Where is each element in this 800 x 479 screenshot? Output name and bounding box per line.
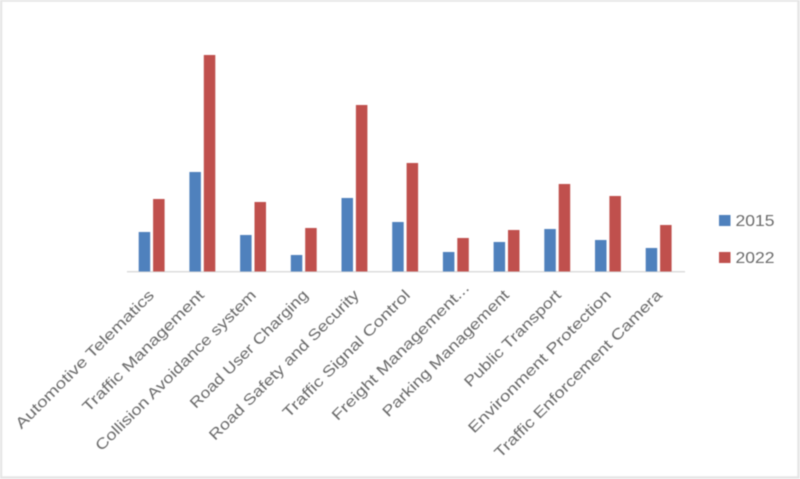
label: Public Transport: Public Transport [461,286,566,391]
bars: Environment Protection [595,196,621,272]
label: Collision Avoidance system: Collision Avoidance system [92,287,260,454]
label: Road Safety and Security: Road Safety and Security [206,286,363,444]
label: Road User Charging: Road User Charging [187,287,312,412]
bars: Collision Avoidance system [240,202,266,272]
bars: Traffic Enforcement Camera [646,225,672,272]
legend item: 2022: 2022 [736,250,774,267]
bars: Freight Management [443,238,469,272]
bars: Road User Charging [291,228,317,272]
label: Automotive Telematics: Automotive Telematics [12,287,158,432]
bars: Parking Management [494,230,520,272]
legend [719,213,774,267]
label: Freight Management...: Freight Management... [329,280,473,424]
label: Environment Protection: Environment Protection [465,287,615,437]
legend item: 2015: 2015 [736,213,774,230]
bars: Automotive Telematics [139,199,165,272]
bars: Public Transport [544,184,570,272]
bars: Traffic Management [189,55,215,272]
label: Parking Management: Parking Management [379,286,514,420]
label: Traffic Management: Traffic Management [79,286,209,416]
label: Traffic Enforcement Camera: Traffic Enforcement Camera [491,286,666,461]
bars: Traffic Signal Control [392,163,418,272]
bar chart [127,55,685,272]
category axis labels [12,280,666,461]
label: Traffic Signal Control: Traffic Signal Control [279,287,414,421]
bars: Road Safety and Security [342,105,367,272]
